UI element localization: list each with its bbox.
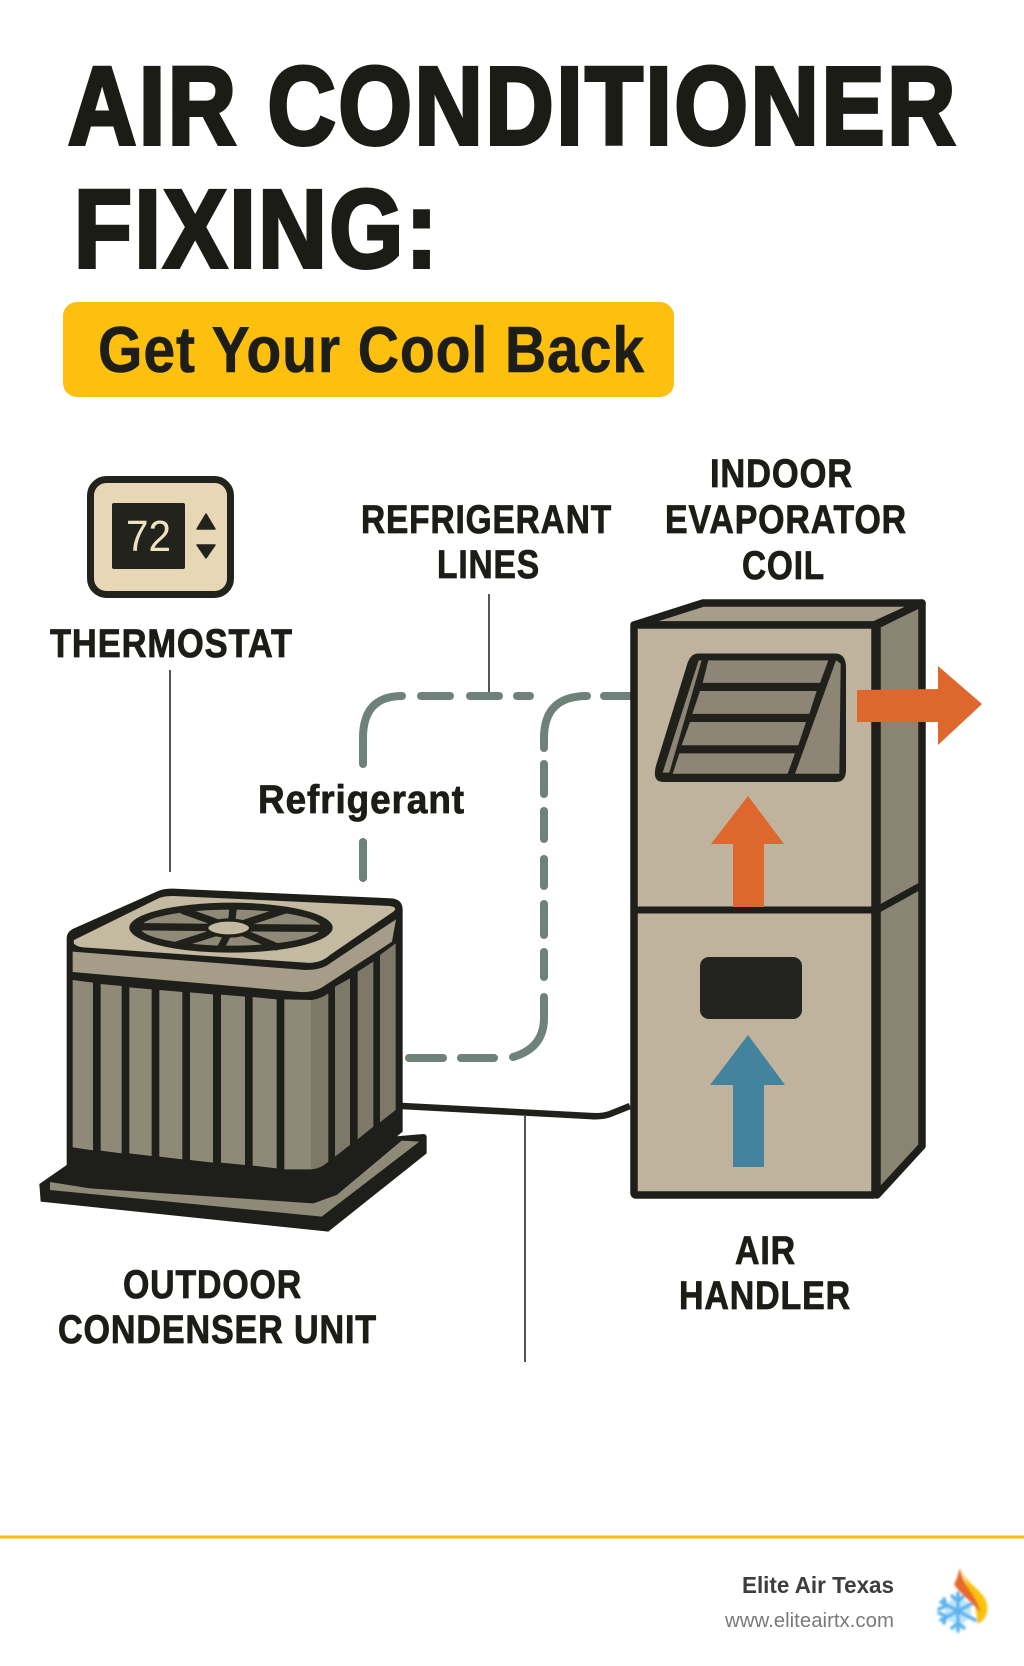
icon: brand logo flame and snowflake <box>939 1568 987 1631</box>
label: indoor evaporator coil: EVAPORATOR <box>665 498 907 542</box>
footer brand text: Elite Air Texas <box>742 1572 894 1598</box>
cabinet side face <box>877 603 922 1195</box>
footer rule <box>0 1536 1024 1538</box>
title: FIXING: <box>74 168 440 291</box>
icon: air handler cabinet <box>634 603 982 1195</box>
subtitle pill: Get Your Cool Back <box>98 313 645 386</box>
fan grille <box>129 903 333 953</box>
label: indoor evaporator coil <box>665 452 907 588</box>
leader line: cable <box>524 1116 526 1362</box>
label: air handler <box>679 1229 851 1318</box>
label: outdoor condenser unit: OUTDOOR <box>123 1263 302 1307</box>
condenser lid <box>74 896 395 963</box>
arrow: cool air up <box>710 1035 785 1167</box>
condenser body <box>67 889 403 1202</box>
label: refrigerant lines: LINES <box>437 543 540 587</box>
leader line: thermostat <box>169 670 171 872</box>
condenser base pad <box>39 1134 427 1232</box>
leader line: refrigerant lines <box>488 594 490 692</box>
condenser front slats <box>73 980 312 1169</box>
condenser band <box>73 919 396 992</box>
label: refrigerant: Refrigerant <box>258 778 465 822</box>
label: air handler: AIR <box>735 1229 796 1273</box>
cabinet top face <box>634 603 922 625</box>
footer brand text <box>724 1572 894 1632</box>
cabinet front face <box>634 625 875 1195</box>
icon: thermostat: 72 <box>126 512 171 561</box>
icon: thermostat <box>90 480 230 594</box>
black cable <box>402 1106 630 1116</box>
label: outdoor condenser unit: CONDENSER UNIT <box>58 1308 377 1352</box>
icon: outdoor condenser unit <box>39 889 427 1232</box>
refrigerant dashed lines <box>363 696 630 1058</box>
air handler display slot <box>700 957 802 1019</box>
label: outdoor condenser unit <box>58 1263 377 1352</box>
label: air handler: HANDLER <box>679 1274 851 1318</box>
arrow: warm air up <box>711 796 784 907</box>
label: thermostat: THERMOSTAT <box>50 622 293 666</box>
condenser corner and side slats <box>312 943 396 1169</box>
label: refrigerant lines <box>361 498 612 587</box>
subtitle pill <box>63 302 674 397</box>
title <box>68 45 958 291</box>
label: indoor evaporator coil: COIL <box>742 544 825 588</box>
evaporator vent <box>655 653 846 782</box>
footer brand text: www.eliteairtx.com <box>724 1610 894 1632</box>
label: indoor evaporator coil: INDOOR <box>710 452 853 496</box>
arrow: warm air out <box>857 666 982 745</box>
label: refrigerant lines: REFRIGERANT <box>361 498 612 542</box>
